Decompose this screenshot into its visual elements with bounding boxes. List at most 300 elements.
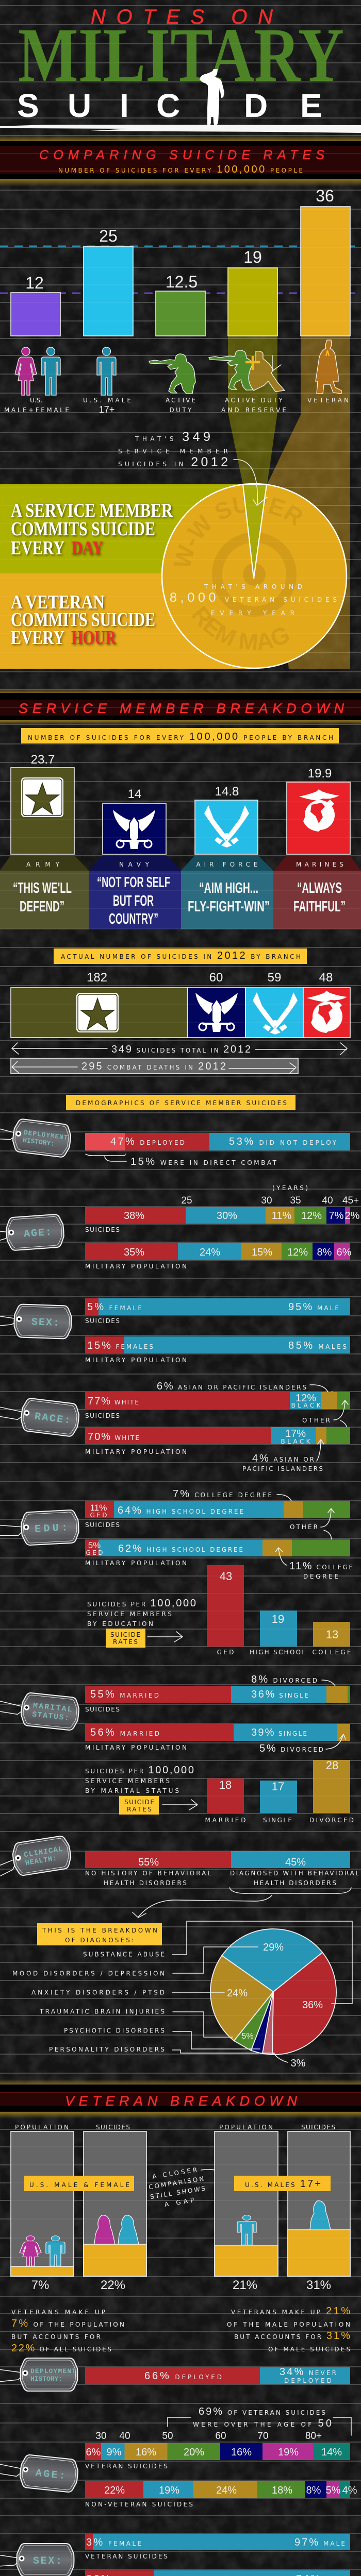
label: US male 17+ [83, 397, 131, 415]
bar: non-veteran suicides by age: NON-VETERAN SUICIDES [85, 2501, 193, 2508]
age axis: 25 [181, 1195, 192, 1206]
bar: age of military population: MILITARY POPULATION [85, 1263, 187, 1270]
label: other with arrows [302, 1400, 348, 1443]
bar: veteran suicides by sex [85, 2534, 350, 2560]
panel: army motto: ARMY [26, 861, 60, 868]
tag: veteran deployment history: DEPLOYMENT [30, 2367, 76, 2375]
band subheading: NUMBER OF SUICIDES FOR EVERY 100,000 PEOPLE [58, 164, 303, 175]
reference dashed lines [0, 246, 361, 293]
panel: army motto: “THIS WE'LL [13, 880, 72, 896]
arrow to male comparison [201, 2170, 225, 2175]
chart caption: SUICIDES PER 100,000 [85, 1765, 194, 1776]
bar: active and reserve 19: 19 [243, 248, 262, 266]
bar: education of suicides: SUICIDES [85, 1521, 120, 1529]
tape: US male and female: U.S. MALE & FEMALE [29, 2181, 129, 2189]
panel: air force motto: FLY-FIGHT-WIN” [188, 899, 270, 915]
label: US male and female [4, 397, 69, 414]
bar: marital status of suicides: SUICIDES [85, 1706, 120, 1713]
bar: race of military population: MILITARY POPULATION [85, 1448, 187, 1455]
label: active duty: ACTIVE [166, 397, 195, 404]
bar: race of suicides: SUICIDES [85, 1412, 120, 1419]
sticky note: suicide rates: RATES [127, 1806, 152, 1813]
circle caption: EVERY YEAR [211, 609, 294, 617]
band heading: VETERAN BREAKDOWN [65, 2093, 297, 2109]
tape: actual number: ACTUAL NUMBER OF SUICIDES IN 2012 BY BRANCH [61, 950, 301, 961]
tape: breakdown of diagnoses: OF DIAGNOSES: [65, 1937, 134, 1944]
bar: education of military population: 5% [88, 1540, 101, 1550]
bar: high school 19: HIGH SCHOOL [250, 1649, 305, 1656]
bar: race of military population [85, 1427, 350, 1472]
bar: GED 43: GED [217, 1649, 234, 1656]
panel: marines motto [273, 855, 361, 929]
bar: education of suicides: GED [90, 1512, 107, 1519]
tag: clinical health: CLINICAL [23, 1845, 63, 1859]
section band: service member breakdown [0, 688, 361, 725]
bar: race of suicides: 12% [296, 1393, 316, 1404]
bar: non-veteran suicides by age: 24% [216, 2485, 237, 2496]
tag: clinical health [0, 1835, 73, 1879]
label: US male 17+: 17+ [99, 404, 114, 415]
label: other with arrows [290, 1509, 334, 1552]
tag: clinical health: HEALTH: [25, 1855, 57, 1868]
bar: education of military population: MILITARY POPULATION [85, 1560, 187, 1567]
chart: US male suicides: 31% [306, 2278, 331, 2292]
icon: bullet base circle: REM MAG [191, 606, 289, 650]
pie labels [227, 1942, 323, 2069]
bar: race of military population: 4% ASIAN OR [252, 1453, 314, 1464]
bar: education of suicides: 11% [90, 1503, 107, 1513]
bar: marital status of military population: MILITARY POPULATION [85, 1744, 187, 1751]
bar: education of military population [85, 1539, 353, 1580]
bar: veteran 36: 36 [316, 187, 334, 205]
tag: marital status: MARITAL [32, 1702, 72, 1714]
tape: rate by branch: NUMBER OF SUICIDES FOR EVERY 100,000 PEOPLE BY BRANCH [28, 731, 333, 742]
bar: clinical health: HEALTH DISORDERS [104, 1879, 187, 1887]
tape: US males 17+ [234, 2176, 331, 2191]
bar: sex of military population: MILITARY POPULATION [85, 1357, 187, 1364]
bar: non-veteran suicides by age: 8% [306, 2485, 321, 2496]
label: other with arrows: OTHER [290, 1523, 318, 1531]
label: US male 17+: U.S. MALE [83, 397, 131, 404]
segment: navy 60 [188, 971, 245, 1038]
section band: veteran breakdown [0, 2079, 361, 2119]
label: active duty: DUTY [169, 406, 192, 414]
bar: high school 19 [250, 1611, 305, 1656]
veteran age axis: 40 [119, 2431, 130, 2442]
bar: veteran deployment: 34% NEVER [280, 2366, 336, 2378]
chart: US male and female suicides [84, 2124, 146, 2292]
tag: race: RACE: [34, 1411, 71, 1427]
text: veterans share of male population: BUT ACCOUNTS FOR 31% [234, 2330, 350, 2342]
bar: clinical health: 55% [138, 1857, 159, 1868]
bar: race of suicides: 77% WHITE [88, 1396, 139, 1407]
bar: married 18 [205, 1778, 245, 1824]
bar: race of suicides [85, 1381, 350, 1419]
section band: comparing suicide rates [0, 135, 361, 187]
note: closer comparison: A GAP [164, 2196, 194, 2208]
bar: active duty 12.5 [156, 273, 205, 336]
chart caption: SERVICE MEMBERS [85, 1777, 170, 1785]
pie connector lines [172, 1921, 352, 2062]
icon: male [97, 347, 116, 395]
bar: veteran suicides by age: 6% [86, 2447, 101, 2458]
arrow label: 349 total [12, 1043, 347, 1055]
diagnosis labels: PSYCHOTIC DISORDERS [64, 2027, 165, 2035]
bar: GED 43: 43 [220, 1570, 232, 1583]
diagnosis labels: SUBSTANCE ABUSE [83, 1951, 165, 1958]
bar: age of suicides: SUICIDES [85, 1226, 120, 1233]
bar: clinical health [85, 1851, 359, 1887]
icons and labels under bars [4, 340, 349, 415]
tag: education [0, 1510, 79, 1547]
panel: navy motto: BUT FOR [113, 893, 154, 909]
chart: US male and female suicides: SUICIDES [96, 2124, 130, 2131]
bar: sex of suicides: 5% FEMALE [87, 1301, 142, 1313]
panel: navy motto: COUNTRY” [109, 911, 158, 927]
bar: marital status of suicides: 8% DIVORCED [251, 1674, 317, 1685]
bar: active and reserve 19 [228, 248, 277, 336]
bar: veteran deployment [85, 2366, 350, 2384]
circle caption [170, 583, 337, 617]
panel: army motto [0, 855, 89, 929]
panel: navy motto [89, 855, 181, 929]
panel: service member every day [0, 484, 254, 573]
segment: air force 59 [245, 971, 303, 1038]
bar: married 18: MARRIED [205, 1817, 245, 1824]
bar: veteran suicides by sex: VETERAN SUICIDES [85, 2553, 168, 2560]
bar: veteran suicides by age: VETERAN SUICIDES [85, 2463, 168, 2470]
bar: veteran suicides by sex: 3% FEMALE [86, 2537, 141, 2548]
bar: age of suicides: 30% [217, 1210, 237, 1222]
bar: veteran suicides by age: 14% [321, 2447, 342, 2458]
label: other with arrows: OTHER [302, 1417, 330, 1424]
bar: college 13: 13 [326, 1628, 338, 1641]
tag: deployment history [0, 1116, 72, 1158]
statement: service member every day: DAY [71, 537, 103, 559]
tag: veteran deployment history: HISTORY: [30, 2375, 62, 2383]
bar: age of military population: 35% [124, 1247, 144, 1258]
bar: veteran suicides by age: 16% [231, 2447, 252, 2458]
note: closer comparison: A CLOSER [152, 2166, 198, 2180]
bar: marines 19.9: 19.9 [308, 767, 332, 781]
pie labels: 5% [241, 2032, 254, 2041]
callout: 349 service member suicides: SERVICE MEMBER [118, 448, 228, 455]
bar: veteran deployment: DEPLOYED [284, 2377, 332, 2384]
panel: army motto: DEFEND” [20, 899, 64, 915]
bar: non-veteran suicides by age: 19% [159, 2485, 179, 2496]
bar: US male and female 12: 12 [25, 274, 44, 292]
bar: education of military population: DEGREE [303, 1573, 338, 1580]
bar: education of suicides: 7% COLLEGE DEGREE [173, 1488, 272, 1500]
tag: marital status [0, 1690, 80, 1731]
bar: US male 17+ 25: 25 [99, 227, 118, 245]
panel: navy motto: “NOT FOR SELF [97, 874, 170, 891]
statement: service member every day: A SERVICE MEMBER [11, 500, 173, 521]
diagnosis labels [12, 1951, 165, 2053]
bar: sex of suicides: SUICIDES [85, 1317, 120, 1325]
bar: divorced 28: DIVORCED [309, 1817, 354, 1824]
statement: veteran every hour: A VETERAN [11, 591, 105, 613]
statement: service member every day: EVERY [11, 537, 64, 559]
statement: veteran every hour [11, 591, 155, 649]
bar: non-veteran suicides by age [85, 2481, 357, 2508]
bar: age of military population [85, 1243, 352, 1270]
segment: army 182 [11, 971, 188, 1038]
diagnosis labels: ANXIETY DISORDERS / PTSD [31, 1989, 165, 1996]
bar: marital status of suicides: 55% MARRIED [90, 1689, 159, 1700]
bar: college 13 [313, 1622, 351, 1656]
chart: US male and female population: 7% [31, 2278, 49, 2292]
bar: active duty 12.5: 12.5 [166, 273, 198, 291]
icon: saluting soldier [200, 69, 224, 125]
veteran age axis [95, 2431, 322, 2442]
tag: veteran age: AGE: [35, 2467, 66, 2482]
callout: direct combat [86, 1154, 277, 1167]
bar: sex of suicides [85, 1298, 350, 1325]
bar: air force 14.8: 14.8 [215, 785, 239, 799]
tag: age [0, 1214, 65, 1251]
text: veterans share of all population: BUT ACCOUNTS FOR [11, 2333, 101, 2341]
bar: sex of military population: 15% FEMALES [87, 1340, 153, 1351]
chart caption [85, 1765, 194, 1794]
panel: veteran every hour [0, 573, 254, 669]
bar: veteran suicides by age: 19% [278, 2447, 299, 2458]
diagnosis labels: TRAUMATIC BRAIN INJURIES [39, 2008, 165, 2015]
bar: age of suicides: 2% [345, 1210, 360, 1222]
bar: race of military population: 70% WHITE [88, 1431, 139, 1443]
bar: education of military population: 62% HIGH SCHOOL DEGREE [118, 1543, 243, 1554]
chart caption: BY EDUCATION [87, 1620, 153, 1628]
bar: high school 19: 19 [272, 1613, 284, 1625]
callout: over age of 50: WERE OVER THE AGE OF 50 [193, 2418, 332, 2429]
tag: deployment history: DEPLOYMENT [23, 1129, 69, 1142]
age axis [181, 1184, 359, 1206]
tag: race [0, 1395, 80, 1437]
bar: non-veteran suicides by age: 18% [272, 2485, 292, 2496]
bar: sex of military population: 85% MALES [288, 1340, 347, 1351]
bar: single 17: SINGLE [263, 1817, 292, 1824]
diagnosis labels: MOOD DISORDERS / DEPRESSION [12, 1970, 165, 1977]
bar: age of military population: 8% [317, 1247, 332, 1258]
label: US male and female: MALE+FEMALE [4, 406, 69, 414]
text: veterans share of male population: OF MALE SUICIDES [268, 2346, 350, 2353]
tag: sex [0, 1303, 72, 1339]
bar: veteran suicides by age: 9% [107, 2447, 122, 2458]
text: veterans share of male population: OF THE MALE POPULATION [227, 2321, 350, 2328]
icon: bullet base circle [161, 483, 348, 669]
age axis: 35 [290, 1195, 301, 1206]
bar: age of suicides: 7% [329, 1210, 344, 1222]
bar: college 13: COLLEGE [313, 1649, 351, 1656]
label: active duty and reserve [221, 397, 286, 414]
bar: GED 43 [207, 1565, 244, 1656]
tape: US males 17+: U.S. MALES 17+ [245, 2178, 321, 2190]
sticky note: suicide rates: SUICIDE [110, 1631, 140, 1638]
panel: air force motto [181, 855, 273, 929]
pie labels: 24% [227, 1988, 248, 1999]
tag: veteran age [0, 2452, 79, 2493]
tag: education: EDU: [35, 1522, 68, 1536]
age axis: 45+ [342, 1195, 359, 1206]
text: veterans share of male population: VETERANS MAKE UP 21% [231, 2306, 350, 2317]
bar: age of military population: 6% [337, 1247, 352, 1258]
pie labels: 29% [263, 1942, 284, 1953]
callout: 349 service member suicides: SUICIDES IN 2012 [118, 455, 228, 469]
chart: US male and female suicides: 22% [101, 2278, 125, 2292]
tape: breakdown of diagnoses [37, 1923, 162, 1945]
label: veteran: VETERAN [307, 397, 349, 404]
segment: air force 59: 59 [268, 971, 281, 985]
chart: US male and female population: POPULATION [15, 2124, 69, 2131]
tag: veteran sex [0, 2544, 74, 2576]
icon: veteran [316, 340, 341, 394]
icon: kneeling soldier [149, 354, 195, 394]
bar: education of military population: GED [86, 1549, 103, 1556]
statement: veteran every hour: HOUR [71, 627, 116, 649]
text: veterans share of male population [227, 2306, 350, 2353]
bar: single 17 [260, 1780, 297, 1824]
label: active duty and reserve: ACTIVE DUTY [225, 397, 283, 404]
bar: age of suicides [85, 1207, 360, 1233]
bar: divorced 28: 28 [326, 1759, 338, 1772]
bar: sex of military population [85, 1336, 350, 1364]
arrow to bars [162, 1800, 198, 1810]
beams from bars down to bullet [228, 336, 350, 669]
bar: veteran 36 [301, 187, 350, 336]
tape: US male and female [24, 2176, 134, 2191]
age axis: 30 [261, 1195, 272, 1206]
bar: veteran suicides by age: 16% [136, 2447, 156, 2458]
bar: clinical health: 45% [285, 1857, 306, 1868]
bar: age of military population: 12% [287, 1247, 308, 1258]
veteran age axis: 60 [215, 2431, 226, 2442]
bar: non-veteran suicides by age: 4% [342, 2485, 357, 2496]
bar: education of suicides [85, 1488, 350, 1529]
bar: army 23.7 [11, 753, 74, 854]
tag: sex: SEX: [31, 1316, 59, 1329]
chart caption [87, 1598, 196, 1628]
bar: age of suicides: 38% [124, 1210, 144, 1222]
bar: clinical health: HEALTH DISORDERS [254, 1879, 336, 1887]
band heading: SERVICE MEMBER BREAKDOWN [19, 701, 344, 716]
bar: deployment [85, 1133, 350, 1150]
chart: suicide rate by branch [11, 753, 350, 854]
statement: veteran every hour: COMMITS SUICIDE [11, 609, 155, 631]
panel: navy motto: NAVY [119, 861, 150, 868]
segment: army 182: 182 [87, 971, 107, 985]
sticky note: suicide rates: SUICIDE [124, 1799, 154, 1806]
tag: veteran sex: SEX: [33, 2555, 62, 2567]
bar: non-veteran suicides by age: 5% [326, 2485, 341, 2496]
age axis: 40 [322, 1195, 333, 1206]
title word: suicide: SUICIDE [17, 87, 322, 124]
bar: married 18: 18 [219, 1778, 232, 1791]
bar: education of suicides: 64% HIGH SCHOOL DEGREE [118, 1505, 243, 1516]
chart: US male suicides: SUICIDES [301, 2124, 335, 2131]
text: veterans share of all population: 22% OF ALL SUICIDES [11, 2343, 111, 2354]
tag: marital status: STATUS: [31, 1710, 70, 1723]
chart: US male population: POPULATION [219, 2124, 273, 2131]
text: veterans share of all population: 7% OF THE POPULATION [11, 2318, 124, 2329]
bar: deployment: 53% DID NOT DEPLOY [229, 1136, 337, 1147]
segment: marines 48 [303, 971, 350, 1038]
text: veterans share of all population [11, 2309, 124, 2354]
bar: US male and female 12 [11, 274, 60, 336]
statement: service member every day [11, 500, 173, 559]
bar: race of military population: BLACK [281, 1438, 311, 1445]
veteran age axis: 70 [257, 2431, 269, 2442]
statement: service member every day: COMMITS SUICIDE [11, 518, 155, 540]
callout: 349 service member suicides [118, 430, 228, 469]
sticky note: suicide rates [119, 1796, 159, 1815]
tag: age: AGE: [23, 1227, 52, 1241]
veteran age axis: 50 [162, 2431, 173, 2442]
chart caption: SERVICE MEMBERS [87, 1611, 172, 1618]
bar: education of military population: 11% COLLEGE [289, 1561, 353, 1572]
pie labels: 36% [302, 1999, 323, 2011]
bar: clinical health: DIAGNOSED WITH BEHAVIORAL [230, 1870, 359, 1877]
veteran age axis: 30 [95, 2431, 107, 2442]
box: 295 combat deaths: 295 COMBAT DEATHS IN 2012 [81, 1061, 226, 1072]
sticky note: suicide rates [106, 1629, 145, 1648]
bar: navy 14 [103, 787, 166, 854]
arrow: 349 to wedge [234, 460, 267, 505]
tape: demographics: DEMOGRAPHICS OF SERVICE MEMBER SUICIDES [76, 1099, 287, 1107]
bar: age of military population: 15% [252, 1247, 272, 1258]
bar: age of suicides: 12% [301, 1210, 322, 1222]
chart: US male population: 21% [233, 2278, 257, 2292]
slice: anxiety 36 red [272, 1953, 336, 2055]
bar chart: suicide rates [11, 187, 350, 336]
title [17, 6, 344, 125]
arrow label: 349 total: 349 SUICIDES TOTAL IN 2012 [111, 1044, 251, 1055]
label: US male and female: U.S. [30, 397, 42, 404]
bar: air force 14.8 [195, 785, 258, 854]
bar: marital status of military population: 56% MARRIED [90, 1727, 159, 1738]
pie chart: diagnoses [210, 1929, 336, 2055]
brace and arrow to breakdown [133, 1888, 351, 1918]
tag: veteran deployment history [0, 2358, 77, 2391]
panel: air force motto: AIR FORCE [196, 861, 258, 868]
diagnosis labels: PERSONALITY DISORDERS [49, 2046, 165, 2053]
brush stroke under title [0, 125, 361, 133]
bar: race of military population: 17% [285, 1428, 306, 1439]
bar: marital status of suicides [85, 1674, 350, 1713]
icon: soldier plus reserve soldier [209, 350, 285, 392]
bar: marital status of military population [85, 1724, 350, 1754]
bar: veteran suicides by age [85, 2443, 350, 2470]
text: veterans share of all population: VETERANS MAKE UP [11, 2309, 105, 2316]
tape: actual number [54, 948, 307, 964]
age axis: (YEARS) [272, 1184, 308, 1192]
tape: breakdown of diagnoses: THIS IS THE BREAKDOWN [42, 1927, 157, 1934]
panel: air force motto: “AIM HIGH... [199, 880, 258, 896]
bar: age of suicides: 11% [272, 1210, 291, 1222]
bar: US male 17+ 25 [84, 227, 133, 336]
band heading: COMPARING SUICIDE RATES [39, 148, 324, 162]
title line: notes on: NOTES ON [91, 6, 273, 28]
icon: bullet base circle: W-W SUPER [173, 496, 302, 566]
bar: divorced 28 [309, 1759, 354, 1824]
bar: deployment: 47% DEPLOYED [110, 1136, 185, 1147]
bar: veteran suicides by age: 20% [184, 2447, 204, 2458]
bar: race of military population: PACIFIC ISLANDERS [242, 1465, 323, 1472]
circle caption: THAT'S AROUND [204, 583, 302, 590]
note: closer comparison: STILL SHOWS [150, 2185, 206, 2200]
callout: over age of 50 [168, 2406, 351, 2435]
bar: race of suicides: BLACK [291, 1402, 321, 1409]
label: active duty and reserve: AND RESERVE [221, 406, 286, 414]
